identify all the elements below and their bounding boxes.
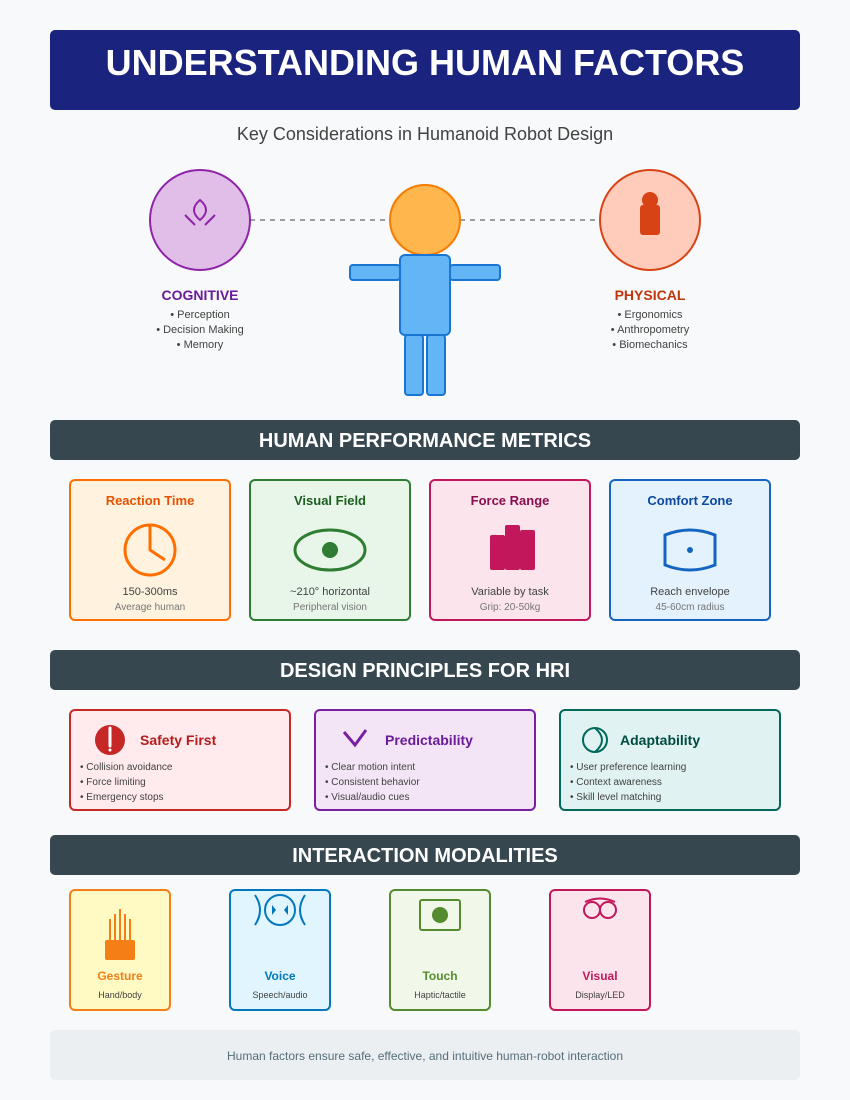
- footer: [50, 1030, 800, 1080]
- physical list: [611, 309, 690, 351]
- humanoid figure: [350, 185, 500, 395]
- panel: visual: Display/LED: [575, 990, 625, 1000]
- footer: Human factors ensure safe, effective, and intuitive human-robot interaction: [227, 1049, 623, 1063]
- icon: brain circle: [150, 170, 250, 270]
- heading: performance metrics: [50, 420, 800, 460]
- panel: visual field: Peripheral vision: [293, 602, 367, 613]
- panel: adaptability: Adaptability: [620, 732, 700, 748]
- panel: safety first: • Emergency stops: [80, 792, 164, 803]
- panel: adaptability: • Context awareness: [570, 777, 662, 788]
- panel: touch: Touch: [422, 969, 458, 983]
- cognitive list: • Memory: [177, 339, 224, 351]
- panel: gesture: Hand/body: [98, 990, 142, 1000]
- panel: reaction time: Reaction Time: [106, 493, 194, 508]
- title: [50, 30, 800, 110]
- icon: hand: [105, 909, 135, 960]
- panel: visual: [550, 890, 650, 1010]
- panel: voice: [230, 890, 330, 1010]
- icon: eye: [295, 530, 365, 570]
- heading: design principles: DESIGN PRINCIPLES FOR HRI: [280, 660, 570, 682]
- cognitive heading: COGNITIVE: [161, 287, 239, 303]
- panel: adaptability: • Skill level matching: [570, 792, 661, 803]
- panel: force range: Grip: 20-50kg: [480, 602, 540, 613]
- panel: touch: [390, 890, 490, 1010]
- heading: design principles: [50, 650, 800, 690]
- cognitive list: • Decision Making: [156, 324, 244, 336]
- panel: predictability: • Clear motion intent: [325, 762, 415, 773]
- panel: cognitive: [150, 170, 250, 351]
- icon: speech: [255, 895, 305, 925]
- panel: adaptability: [560, 710, 780, 810]
- cognitive list: • Perception: [170, 309, 230, 321]
- panel: predictability: • Consistent behavior: [325, 777, 420, 788]
- physical list: • Ergonomics: [618, 309, 683, 321]
- heading: interaction modalities: INTERACTION MODALITIES: [292, 845, 558, 867]
- panel: voice: Voice: [264, 969, 296, 983]
- panel: reaction time: [70, 480, 230, 620]
- panel: visual field: ~210° horizontal: [290, 586, 370, 598]
- panel: reaction time: Average human: [115, 602, 185, 613]
- connector: figure to physical: [460, 219, 600, 221]
- panel: gesture: Gesture: [97, 969, 143, 983]
- icon: body circle: [600, 170, 700, 270]
- icon: reach envelope: [665, 530, 715, 570]
- subtitle: Key Considerations in Humanoid Robot Design: [237, 124, 613, 144]
- panel: force range: [430, 480, 590, 620]
- icon: clock: [125, 525, 175, 575]
- panel: adaptability: • User preference learning: [570, 762, 686, 773]
- icon: warning: [95, 725, 125, 755]
- panel: visual field: [250, 480, 410, 620]
- icon: force bars: [490, 525, 535, 570]
- panel: reaction time: 150-300ms: [122, 586, 178, 598]
- panel: force range: Force Range: [471, 493, 549, 508]
- panel: comfort zone: Comfort Zone: [647, 493, 733, 508]
- heading: performance metrics: HUMAN PERFORMANCE METRICS: [259, 430, 591, 452]
- heading: interaction modalities: [50, 835, 800, 875]
- panel: safety first: Safety First: [140, 732, 217, 748]
- icon: touch pad: [420, 900, 460, 930]
- panel: safety first: [70, 710, 290, 810]
- icon: glasses: [584, 898, 616, 918]
- panel: comfort zone: 45-60cm radius: [656, 602, 724, 613]
- icon: check: [344, 730, 366, 745]
- panel: gesture: [70, 890, 170, 1010]
- physical list: • Anthropometry: [611, 324, 690, 336]
- icon: adapt circle: [583, 728, 607, 752]
- panel: visual field: Visual Field: [294, 493, 366, 508]
- panel: force range: Variable by task: [471, 586, 549, 598]
- panel: comfort zone: Reach envelope: [650, 586, 730, 598]
- panel: voice: Speech/audio: [252, 990, 308, 1000]
- panel: predictability: [315, 710, 535, 810]
- physical list: • Biomechanics: [612, 339, 688, 351]
- cognitive list: [156, 309, 244, 351]
- panel: safety first: • Collision avoidance: [80, 762, 173, 773]
- panel: safety first: • Force limiting: [80, 777, 146, 788]
- panel: comfort zone: [610, 480, 770, 620]
- panel: predictability: • Visual/audio cues: [325, 792, 409, 803]
- panel: physical: [600, 170, 700, 351]
- panel: visual: Visual: [582, 969, 618, 983]
- title: UNDERSTANDING HUMAN FACTORS: [106, 42, 744, 83]
- panel: predictability: Predictability: [385, 732, 473, 748]
- connector: cognitive to figure: [250, 219, 390, 221]
- physical heading: PHYSICAL: [615, 287, 686, 303]
- panel: touch: Haptic/tactile: [414, 990, 466, 1000]
